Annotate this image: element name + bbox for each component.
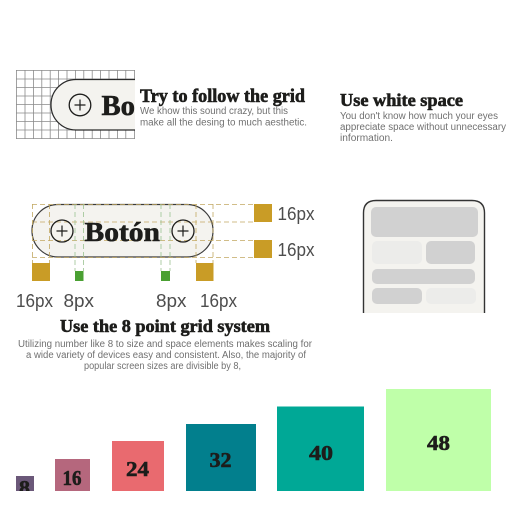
- square 48: [386, 389, 491, 491]
- spacing labels: [16, 204, 314, 311]
- text: 8 point grid description: a wide variety of devices easy and consistent. Also, the majority of: [26, 350, 306, 361]
- icon: right plus circle: [172, 220, 194, 242]
- spacing swatches: 16px gold: [32, 204, 272, 281]
- panel: button anatomy diagram: [16, 204, 314, 311]
- spacing swatches: 8px green: [75, 271, 170, 281]
- heading: try to follow the grid: Try to follow the grid: [140, 87, 306, 107]
- panel: follow the grid illustration: Bo: [102, 90, 135, 122]
- text: follow the grid description: We khow this sound crazy, but this: [140, 106, 288, 117]
- spacing labels: 16px: [278, 204, 314, 224]
- icon: left plus circle: [51, 220, 73, 242]
- spacing labels: 16px: [200, 291, 237, 311]
- square 40: [277, 406, 364, 491]
- text: 8 point grid description: [18, 339, 313, 372]
- text: white space description: information.: [340, 133, 393, 144]
- chart: 8 point size squares: [16, 389, 491, 500]
- text: 8 point grid description: popular screen sizes are divisible by 8,: [84, 361, 241, 372]
- spacing labels: 8px: [64, 291, 94, 311]
- spacing labels: 16px: [278, 240, 314, 260]
- square 32: [186, 424, 256, 491]
- text: 8 point grid description: Utilizing number like 8 to size and space elements makes scaling for: [18, 339, 313, 350]
- button shape: [32, 204, 213, 257]
- heading: use white space: Use white space: [340, 90, 463, 110]
- button label: Botón: [84, 217, 160, 247]
- square 8: [16, 476, 34, 491]
- text: white space description: appreciate space without unnecessary: [340, 122, 506, 133]
- square 24: [112, 441, 164, 491]
- square 40: 40: [309, 441, 333, 465]
- square 16: 16: [62, 466, 82, 490]
- panel: phone layout illustration: [364, 200, 484, 313]
- spacing labels: 8px: [156, 291, 186, 311]
- text: follow the grid description: [140, 106, 307, 128]
- square 24: 24: [126, 457, 150, 481]
- square 32: 32: [210, 448, 232, 472]
- square 8: 8: [19, 476, 30, 500]
- square 16: [55, 459, 90, 491]
- square 48: 48: [427, 431, 450, 455]
- heading: use the 8 point grid system: Use the 8 point grid system: [60, 316, 270, 336]
- text: white space description: You don't know how much your eyes: [340, 111, 498, 122]
- text: follow the grid description: make all the desing to much aesthetic.: [140, 118, 307, 128]
- spacing labels: 16px: [16, 291, 53, 311]
- text: white space description: [340, 111, 506, 144]
- panel: follow the grid illustration: [16, 70, 135, 139]
